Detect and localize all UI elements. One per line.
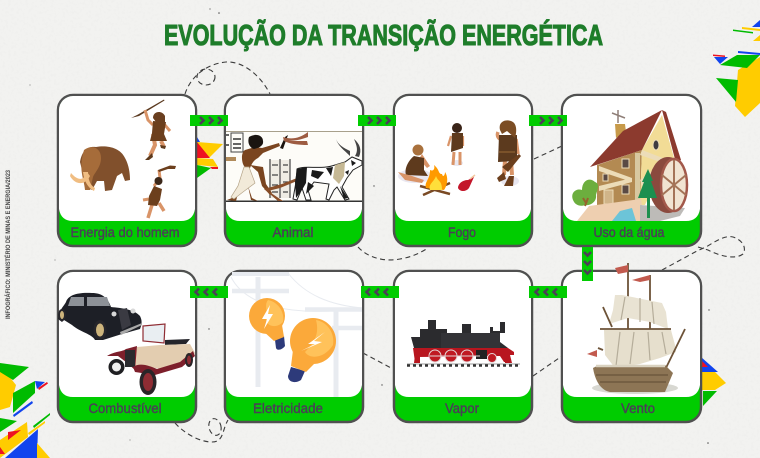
panel: Uso da água: [562, 95, 701, 246]
arrow: Eletricidade to Combustível: [190, 286, 228, 298]
ox: [293, 157, 362, 200]
icon: meat: [458, 175, 475, 191]
illustration: black vintage car: [58, 293, 142, 340]
illustration: Egyptian plowman with ox: [226, 131, 362, 202]
weather vane and chimney: [612, 110, 625, 123]
label: Combustível: [88, 401, 162, 416]
panel: Vento: [562, 263, 701, 422]
icon: hunter with spear: [131, 100, 170, 160]
arrow: Vapor to Eletricidade: [361, 286, 399, 298]
arrow: Vento to Vapor: [529, 286, 567, 298]
label: Uso da água: [594, 225, 665, 240]
arrow: Fogo to Uso da água: [529, 115, 567, 126]
credit: vertical source text: INFOGRÁFICO: MINISTÉRIO DE MINAS E ENERGIA/2023: [3, 170, 12, 319]
walls: [597, 150, 642, 205]
illustration: water mill: [572, 110, 687, 221]
panel: Animal: [225, 95, 363, 246]
icon: small light bulb: [249, 298, 285, 350]
label: Eletricidade: [253, 401, 323, 416]
arrow: Energia do homem to Animal: [190, 115, 228, 126]
decoration: bottom left shapes: [0, 363, 50, 458]
panel: Combustível: [58, 271, 196, 422]
icon: standing man: [497, 120, 521, 186]
pine: [638, 169, 657, 218]
illustration: steam locomotive: [407, 320, 520, 366]
icon: campfire: [420, 165, 450, 195]
label: Vapor: [445, 401, 479, 416]
plowman: [242, 143, 280, 168]
panel: Vapor: [394, 271, 532, 422]
icon: mammoth: [70, 146, 130, 191]
dashed path: links between cards: [175, 146, 744, 442]
illustration: utility poles: [231, 273, 362, 397]
illustration: beige open-top car: [107, 324, 195, 395]
icon: crouching woman: [398, 144, 432, 183]
icon: child: [448, 123, 463, 166]
label: Fogo: [448, 225, 476, 240]
panel: Fogo: [394, 95, 532, 246]
arrow: Animal to Fogo: [358, 115, 396, 126]
label: Vento: [621, 401, 655, 416]
title: EVOLUÇÃO DA TRANSIÇÃO ENERGÉTICA: [164, 18, 603, 52]
panel: Energia do homem: [58, 95, 196, 246]
decoration: shapes between cards 1 and 2: [197, 137, 223, 178]
ground: [577, 199, 645, 221]
roof: [590, 110, 662, 167]
dashed path: top loop: [185, 62, 270, 94]
icon: large light bulb: [288, 318, 336, 382]
illustration: sailing ship: [587, 263, 685, 394]
panel: Eletricidade: [225, 271, 363, 422]
decoration: shapes right of Vento card: [701, 357, 726, 406]
label: Energia do homem: [70, 225, 180, 240]
label: Animal: [272, 225, 314, 240]
water wheel: [649, 157, 687, 213]
bush: [572, 180, 598, 206]
icon: hunter with club: [143, 166, 176, 218]
arrow: Uso da água to Vento: [582, 247, 593, 281]
decoration: top right shapes: [713, 20, 760, 117]
